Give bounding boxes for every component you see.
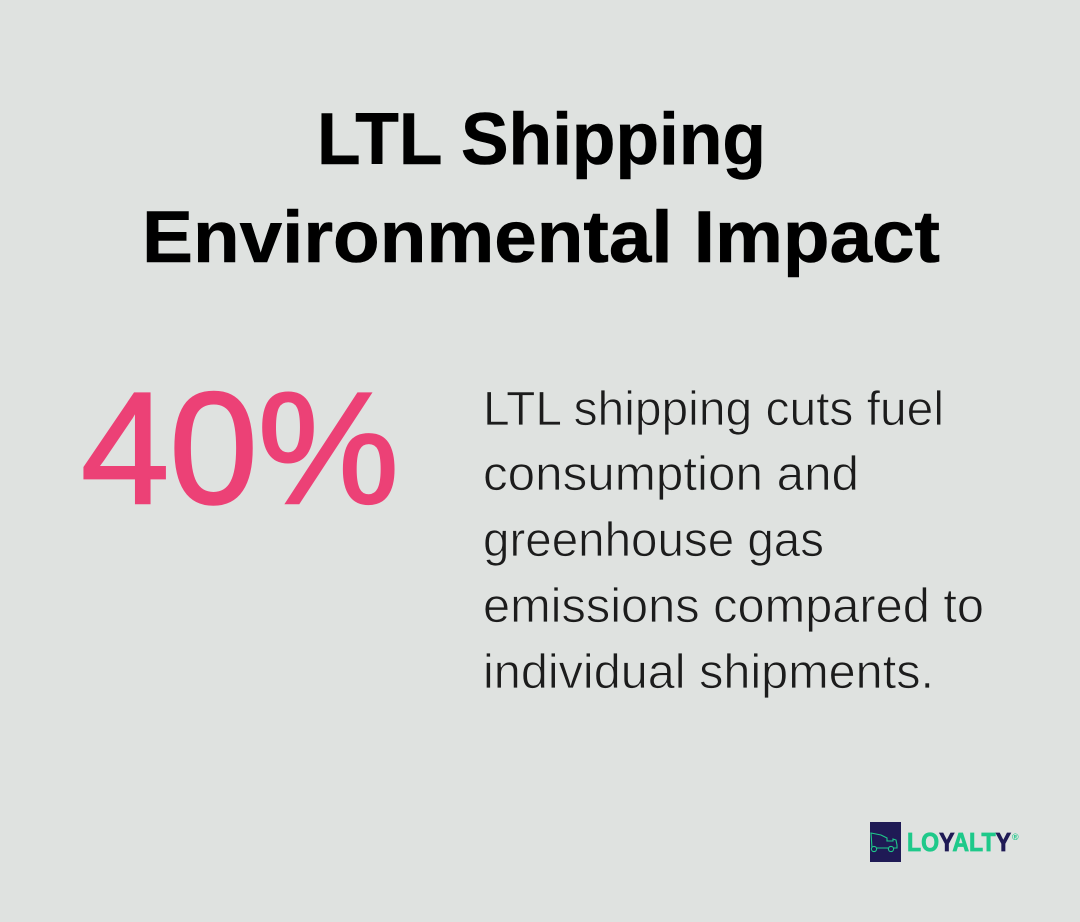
logo: Loyalty — [870, 822, 1019, 862]
registered mark: ® — [1012, 832, 1019, 842]
description text: emissions compared to — [483, 580, 984, 633]
description text: consumption and — [483, 448, 859, 501]
description text: LTL shipping cuts fuel — [483, 383, 944, 436]
icon: truck badge — [870, 822, 901, 862]
statistic: 40%: 40% — [81, 359, 399, 537]
description text: greenhouse gas — [483, 514, 824, 567]
description text — [483, 383, 984, 699]
logo wordmark: LOYALTY — [907, 827, 1011, 857]
title: LTL Shipping — [317, 99, 766, 180]
title — [142, 99, 940, 278]
title: Environmental Impact — [142, 197, 940, 278]
description text: individual shipments. — [483, 646, 934, 699]
